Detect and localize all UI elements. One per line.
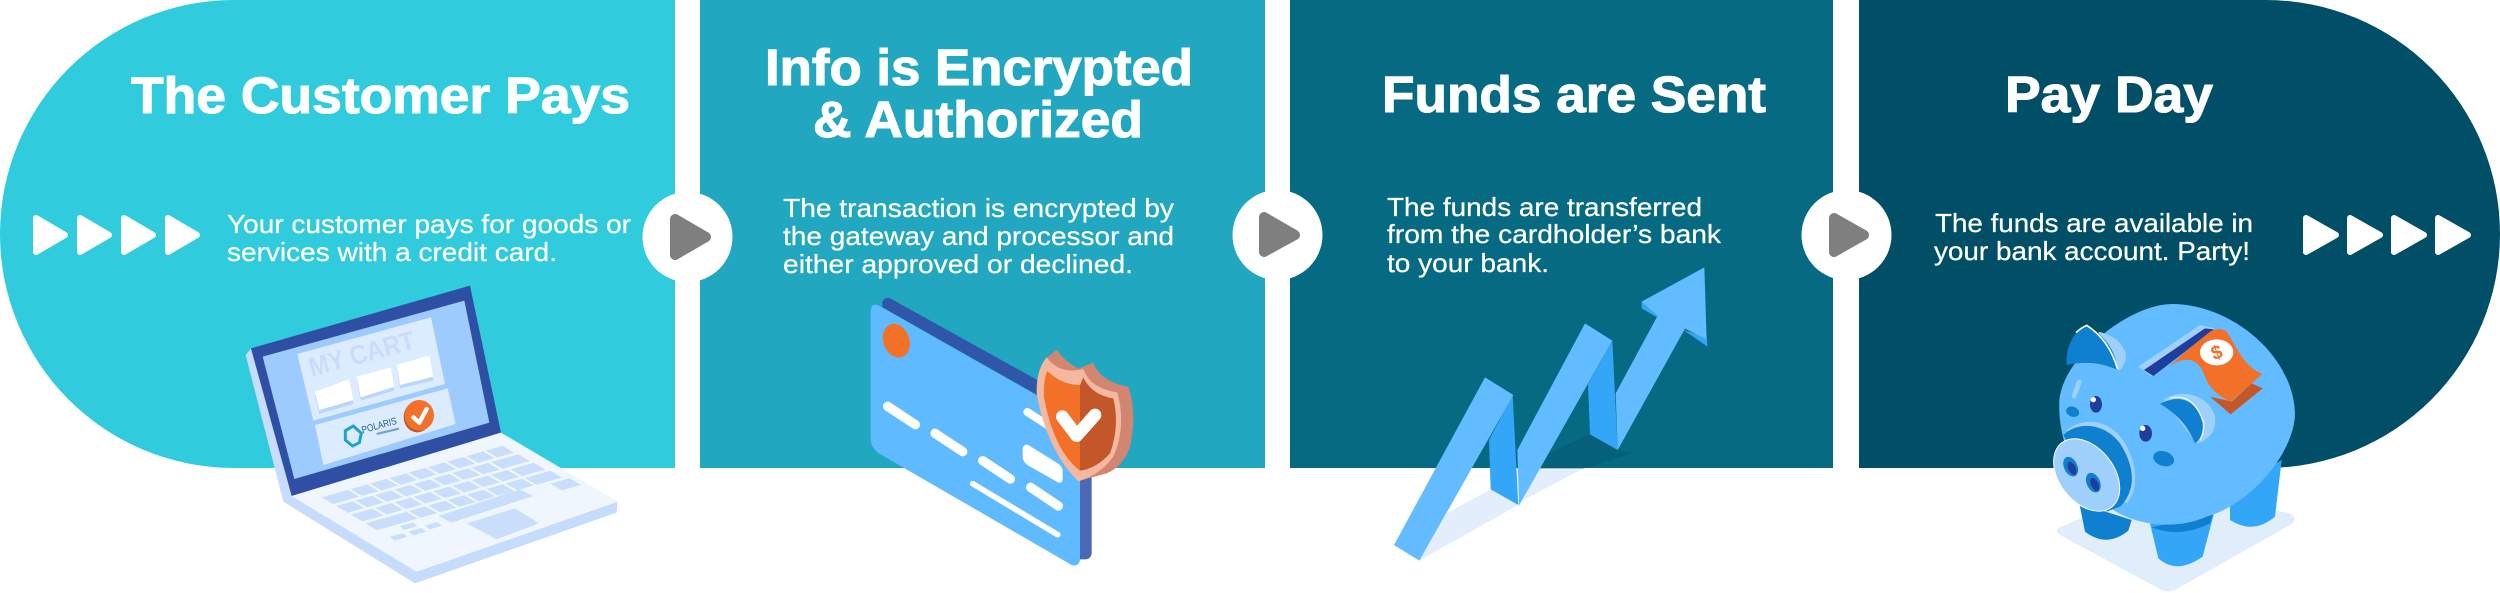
- text block: funds transfer description: to your bank.: [1387, 248, 1549, 278]
- heading: Info is Encrypted & Authorized: Info is Encrypted: [765, 39, 1193, 96]
- panel: info is encrypted and authorized: [700, 0, 1265, 566]
- text block: customer pays description: Your customer pays for goods or: [227, 209, 631, 239]
- illustration: laptop with cart: POLARIS: [361, 416, 398, 436]
- text block: funds transfer description: The funds are transferred: [1387, 192, 1702, 222]
- text block: encryption description: The transaction is encrypted by: [783, 193, 1174, 223]
- heading: The Customer Pays: The Customer Pays: [131, 67, 630, 124]
- illustration: piggy bank: [2040, 304, 2295, 592]
- panel: funds are sent: [1290, 0, 1833, 561]
- arrow: step 2 to 3: [1232, 190, 1322, 280]
- illustration: laptop with cart: MY CART: [305, 325, 418, 382]
- panel background: dark teal: [1290, 0, 1833, 468]
- heading: Info is Encrypted & Authorized: [765, 39, 1193, 148]
- text block: funds transfer description: [1387, 192, 1722, 278]
- text block: pay day description: [1934, 208, 2253, 266]
- heading: Info is Encrypted & Authorized: & Authorized: [813, 91, 1143, 148]
- illustration: laptop with cart: [246, 286, 618, 583]
- text block: funds transfer description: from the cardholder’s bank: [1387, 219, 1722, 249]
- text block: pay day description: your bank account. Party!: [1934, 236, 2250, 266]
- icon: four white arrows: [2306, 218, 2468, 252]
- arrow: step 3 to 4: [1802, 190, 1892, 280]
- text block: encryption description: the gateway and processor and: [783, 221, 1174, 251]
- text block: customer pays description: [227, 209, 631, 267]
- illustration: piggy bank: $: [2208, 342, 2226, 365]
- text block: pay day description: The funds are available in: [1935, 208, 2253, 238]
- text block: encryption description: either approved or declined.: [783, 249, 1133, 279]
- panel: the customer pays: [0, 0, 675, 583]
- arrow: step 1 to 2: [642, 192, 732, 282]
- illustration: rising arrow: [1394, 267, 1708, 561]
- heading: Funds are Sent: Funds are Sent: [1382, 66, 1766, 123]
- panel background: turquoise pill end: [0, 0, 675, 468]
- icon: four white arrows: [36, 218, 197, 252]
- panel background: teal: [700, 0, 1265, 468]
- heading: Pay Day: Pay Day: [2005, 66, 2214, 123]
- panel: pay day: [1859, 0, 2500, 592]
- text block: encryption description: [783, 193, 1174, 279]
- illustration: credit card with shield: [871, 298, 1133, 566]
- text block: customer pays description: services with a credit card.: [227, 237, 557, 267]
- panel background: navy teal pill end: [1859, 0, 2500, 468]
